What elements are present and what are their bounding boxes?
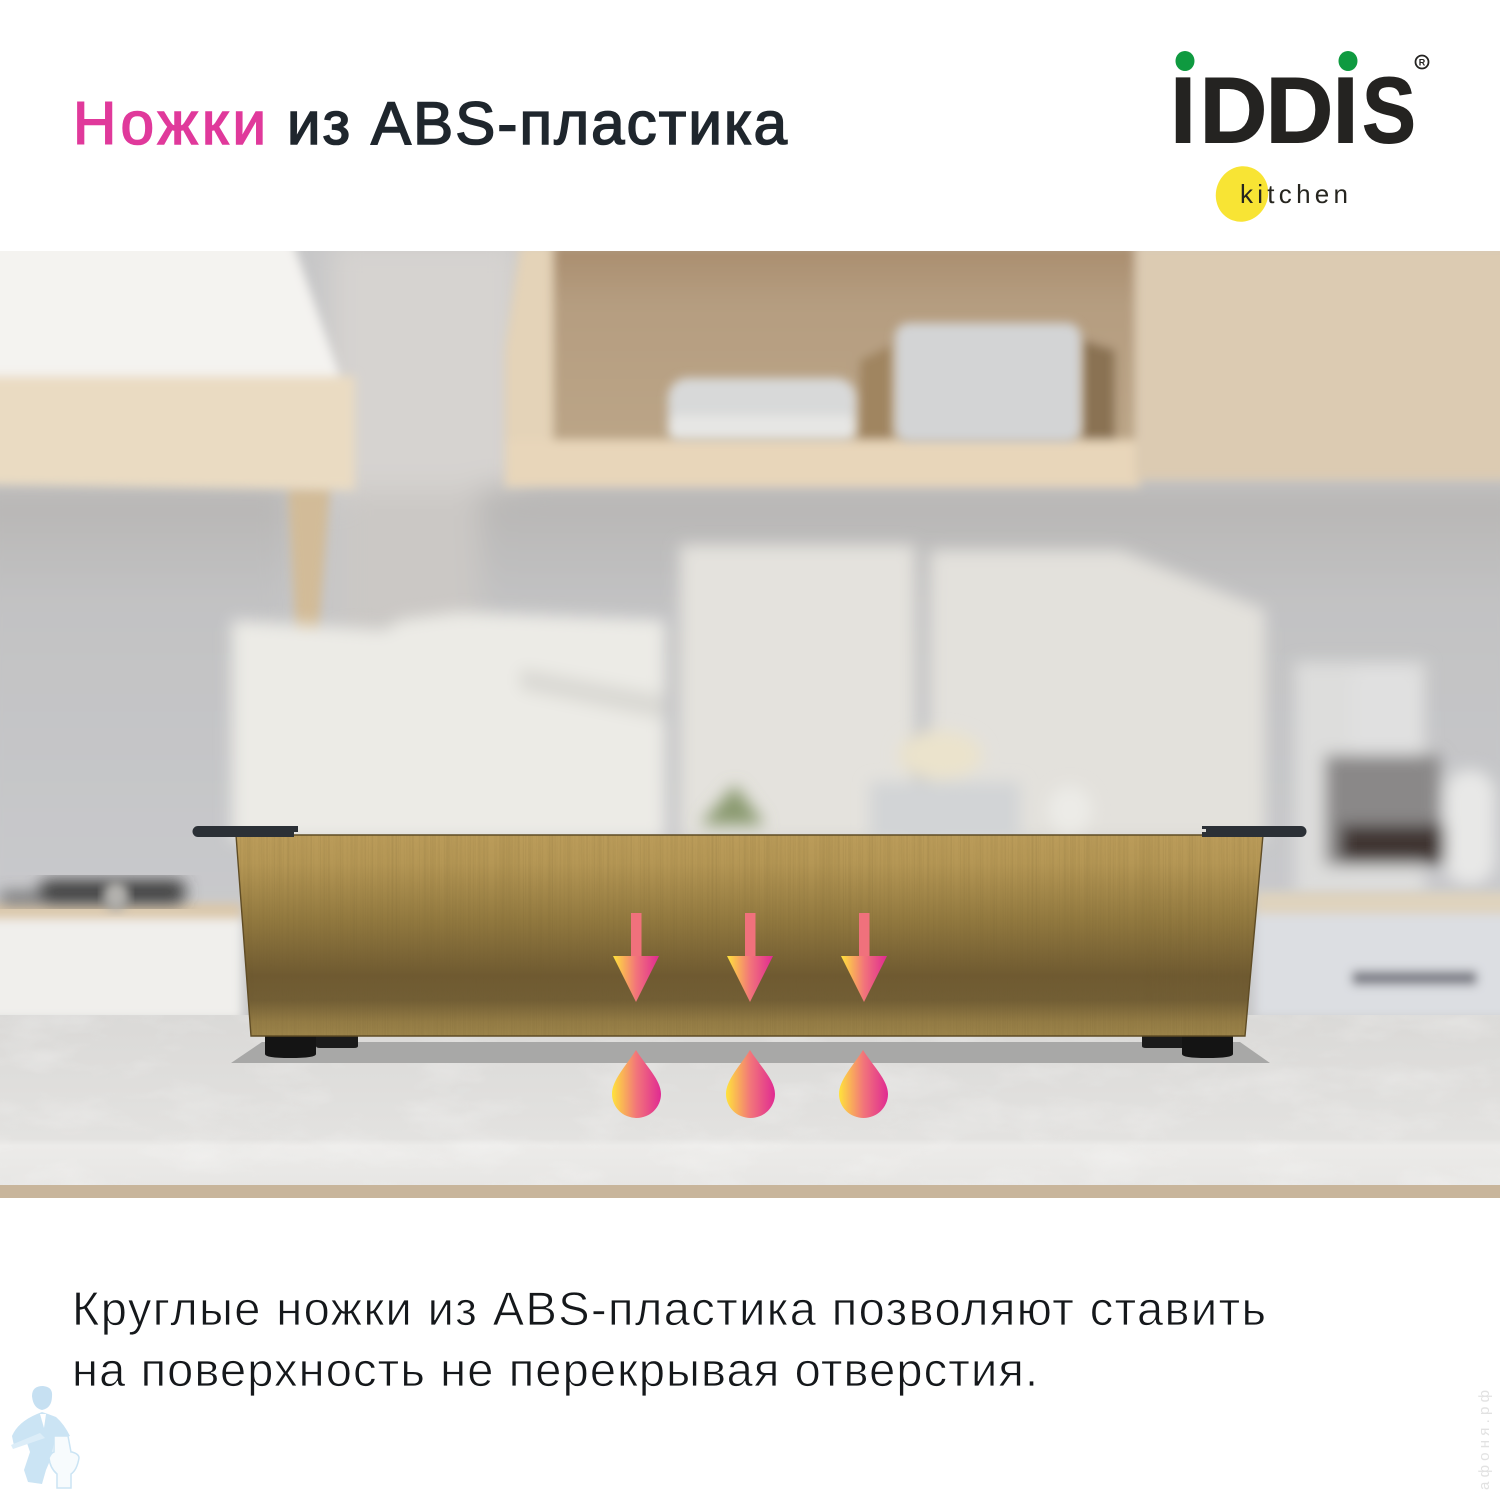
drop 1 [612,1050,661,1118]
description text [72,1282,1266,1396]
cutting boards [232,545,1265,840]
arrows [613,913,887,1002]
watermark: site address: афоня.рф [1476,1390,1493,1490]
title: из ABS-пластика [287,90,788,157]
plates [668,323,1081,442]
right handle rail [1202,826,1306,837]
logo: IDDIS kitchen [1170,51,1428,229]
title: Ножки [73,90,266,157]
logo: IDDIS kitchen: S [1362,58,1416,163]
description text: Круглые ножки из ABS-пластика позволяют ставить [72,1282,1266,1335]
description text: на поверхность не перекрывая отверстия. [72,1343,1038,1396]
sink body [230,833,1270,1038]
arrow 2 [727,913,773,1002]
logo: IDDIS kitchen: kitchen [1240,179,1348,209]
wall behind [0,251,1500,571]
range hood [0,240,355,640]
toaster and herb [700,731,1092,842]
icon: plumber mascot watermark [11,1386,79,1488]
coffee machine [1295,662,1495,897]
photo background: blurred kitchen [0,240,1500,1198]
arrow 3 [841,913,887,1002]
logo: IDDIS kitchen: IDDI [1170,58,1359,162]
sink feet [265,1034,1233,1058]
shadow under sink [231,1042,1270,1063]
wooden shelf [505,245,1500,487]
stove [0,880,185,904]
water drops [612,1050,888,1118]
countertop [0,1015,1500,1187]
counters back [0,892,1500,1020]
logo: IDDIS kitchen: R [1419,58,1426,68]
drop 2 [726,1050,775,1118]
drop 3 [839,1050,888,1118]
left handle rail [192,826,298,837]
arrow 1 [613,913,659,1002]
title [73,90,788,157]
